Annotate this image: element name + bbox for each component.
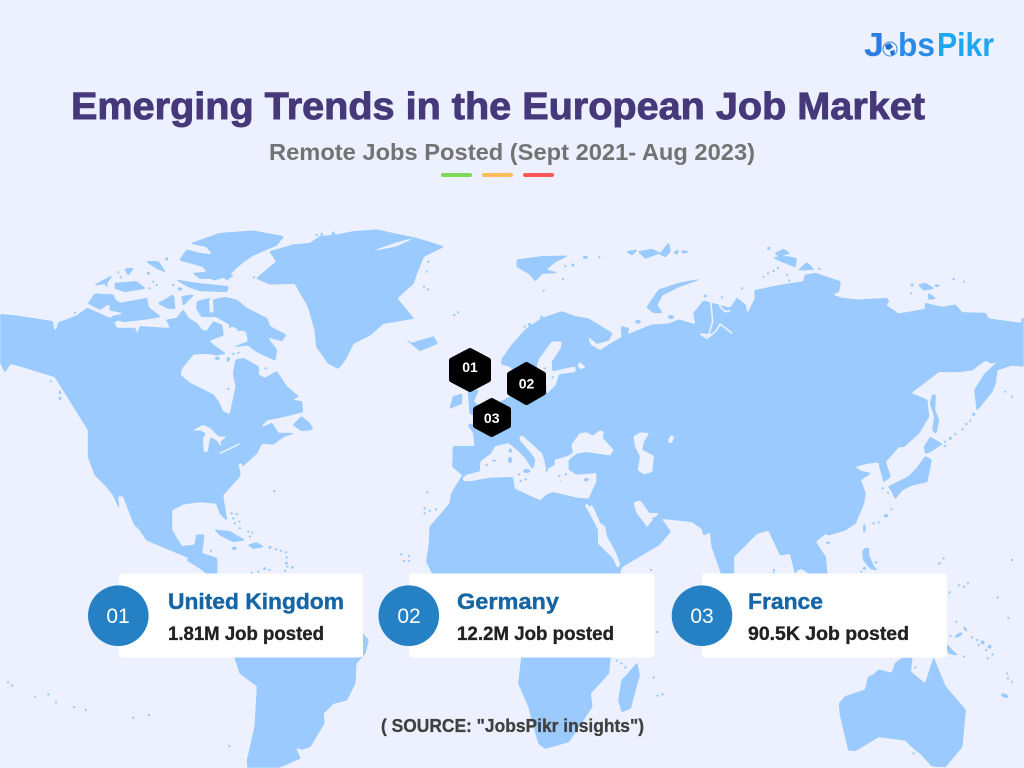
map marker 03: [476, 401, 508, 434]
map marker 01: [452, 351, 488, 389]
card: United Kingdom: [88, 574, 363, 658]
card: United Kingdom: 1.81M Job posted: [168, 624, 324, 645]
card: France: France: [748, 589, 823, 614]
south america: [7, 560, 368, 768]
world map: [0, 230, 1024, 768]
card: France: 90.5K Job posted: [748, 624, 909, 645]
logo: JobsPikr: J: [864, 26, 884, 63]
great britain: [468, 390, 482, 417]
card: Germany: Germany: [457, 589, 560, 614]
card: Germany: [378, 574, 654, 658]
title: Emerging Trends in the European Job Market: [71, 86, 925, 128]
card: Germany: 12.2M Job posted: [457, 624, 614, 645]
card: United Kingdom: United Kingdom: [168, 589, 344, 614]
greenland and iceland: [253, 230, 462, 408]
icon: globe: [883, 42, 897, 56]
logo: JobsPikr: Pikr: [937, 26, 994, 63]
logo: JobsPikr: [864, 26, 994, 63]
logo: JobsPikr: bs: [898, 26, 935, 63]
red sea: [585, 504, 620, 567]
card: France: 03: [690, 605, 714, 628]
source note: ( SOURCE: "JobsPikr insights"): [381, 716, 644, 736]
north america and arctic islands: [0, 231, 460, 573]
card: United Kingdom: 01: [106, 605, 130, 628]
map marker 01: 01: [462, 359, 478, 375]
map marker 02: 02: [519, 376, 534, 392]
africa: [427, 477, 639, 748]
card: France: [672, 574, 947, 658]
card: Germany: 02: [397, 605, 421, 628]
map marker 03: 03: [484, 410, 500, 426]
mediterranean and black sea: [463, 431, 613, 500]
subtitle: Remote Jobs Posted (Sept 2021- Aug 2023): [269, 139, 755, 165]
australia and pacific islands: [616, 561, 1013, 767]
map marker 02: [510, 365, 543, 402]
accent bars: [441, 173, 554, 177]
eurasia: [453, 243, 1024, 573]
